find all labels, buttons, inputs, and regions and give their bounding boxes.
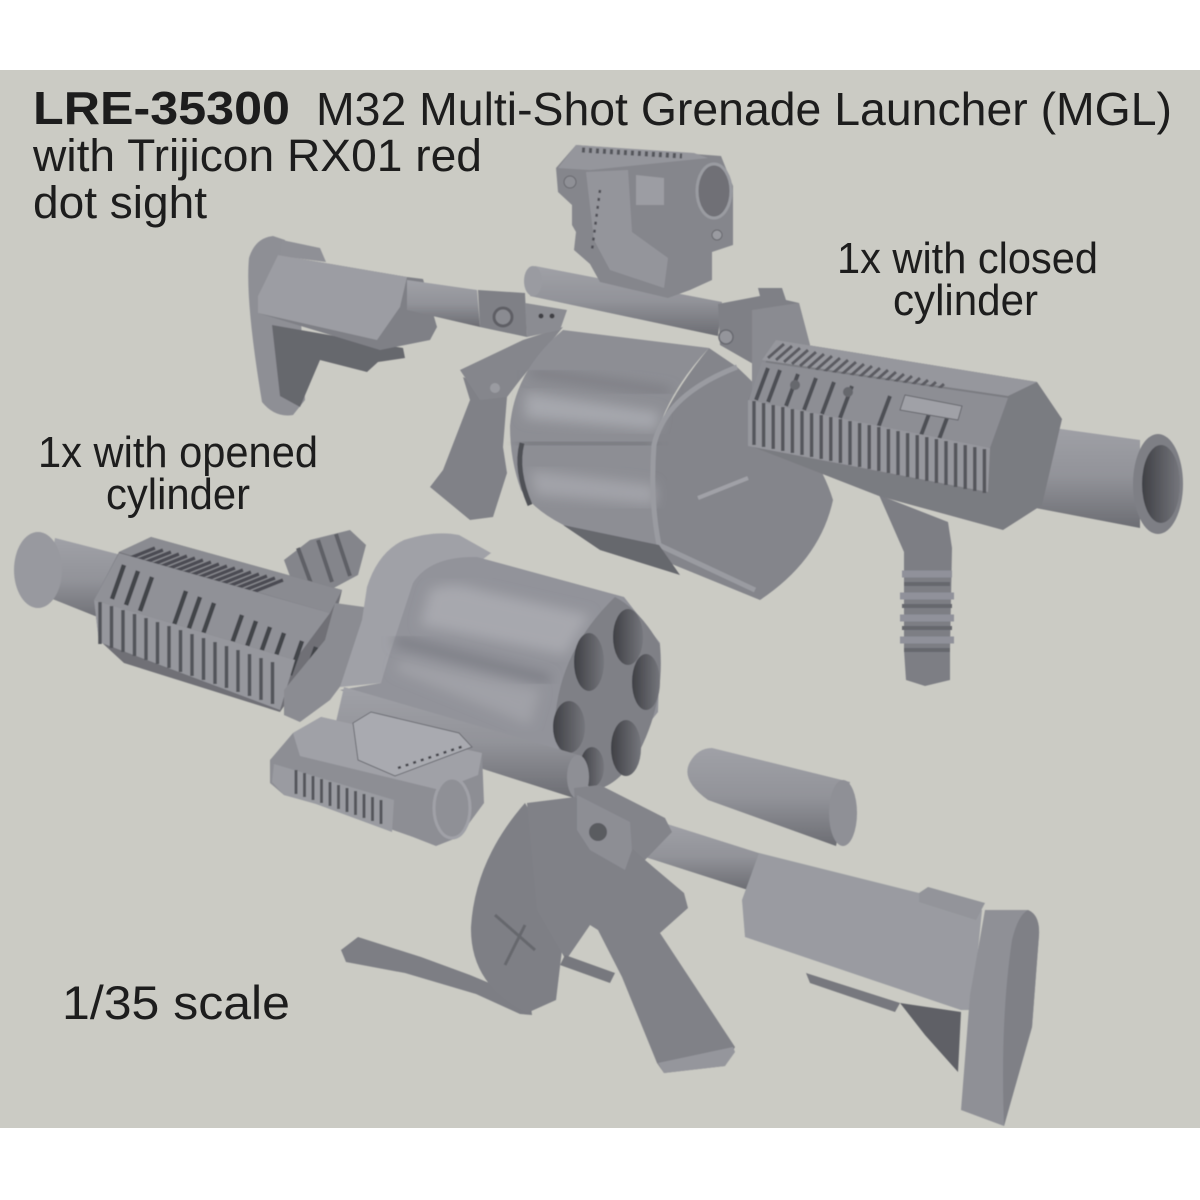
frame block — [284, 603, 371, 722]
label: opened cylinder: 1x with opened — [38, 428, 318, 477]
cylinder end plate — [645, 348, 833, 600]
frame block — [718, 288, 810, 415]
cylinder body — [340, 557, 660, 785]
barrel — [1020, 424, 1183, 534]
upper launcher: closed cylinder — [248, 145, 1183, 686]
cylinder end plate — [340, 533, 491, 687]
cylinder face with chambers — [553, 597, 661, 790]
label: opened cylinder: cylinder — [106, 470, 250, 519]
pistol grip — [430, 377, 507, 520]
sight rod — [336, 687, 589, 799]
rear grip behind rail — [284, 530, 366, 590]
cylinder body — [510, 330, 755, 590]
red dot sight — [270, 712, 484, 846]
barrel — [14, 532, 125, 622]
label: closed cylinder — [837, 234, 1098, 325]
label: scale: 1/35 scale — [62, 976, 290, 1029]
red dot sight — [556, 145, 733, 298]
title: product code and name: dot sight — [33, 177, 207, 228]
upper receiver — [478, 290, 567, 337]
rail handguard — [94, 537, 342, 712]
fore grip — [879, 495, 954, 686]
title: product code and name: M32 Multi-Shot Grenade Launcher (MGL) — [316, 83, 1172, 135]
lower receiver plate — [460, 327, 563, 400]
pistol grip and lower receiver — [527, 795, 735, 1073]
label: closed cylinder: 1x with closed — [837, 234, 1098, 283]
sight rail tube — [524, 266, 722, 336]
stock tube — [645, 823, 765, 890]
butt stock — [742, 853, 1039, 1126]
lower launcher: opened cylinder — [14, 530, 1039, 1126]
rail handguard — [748, 340, 1062, 530]
title: product code and name — [32, 82, 1172, 228]
label: closed cylinder: cylinder — [893, 276, 1038, 325]
grenade round — [687, 748, 857, 846]
label: opened cylinder — [38, 428, 318, 519]
title: product code and name: with Trijicon RX01 red — [32, 130, 482, 181]
title: product code and name: LRE-35300 — [33, 82, 290, 134]
butt stock — [248, 236, 480, 415]
upper receiver plate — [574, 785, 672, 880]
magazine disc and bar — [341, 803, 570, 1015]
